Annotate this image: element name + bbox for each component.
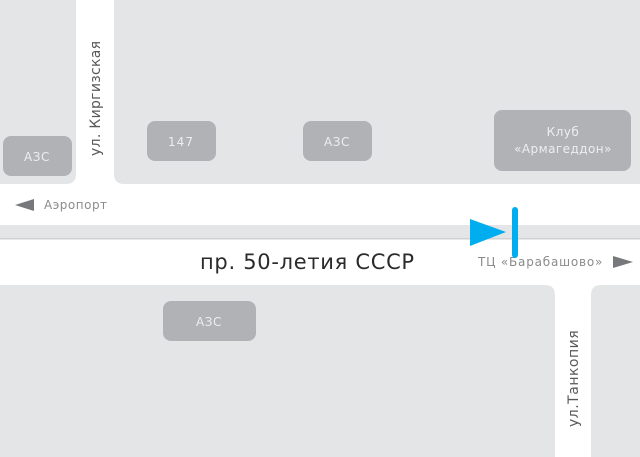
median strip xyxy=(0,225,640,240)
building: АЗС centre xyxy=(303,121,372,161)
arrow: to Barabashovo xyxy=(613,256,633,268)
building: Клуб Армагеддон: Клуб xyxy=(547,125,579,139)
building: 147 xyxy=(147,121,216,161)
building: АЗС bottom: АЗС xyxy=(196,315,222,329)
building: АЗС left: АЗС xyxy=(24,150,50,164)
building: АЗС left xyxy=(3,136,72,176)
building: Клуб Армагеддон xyxy=(494,110,631,171)
arrow: to airport xyxy=(15,199,34,211)
street label: Киргизская: ул. Киргизская xyxy=(88,41,104,156)
block: top right xyxy=(114,0,640,184)
block: top left xyxy=(0,0,76,184)
marker: blue arrow and stop line xyxy=(470,207,518,258)
building: АЗС bottom xyxy=(163,301,256,341)
street label: Танкопия: ул.Танкопия xyxy=(566,330,582,427)
main road label: пр. 50-летия СССР xyxy=(200,250,415,274)
label: Аэропорт: Аэропорт xyxy=(44,198,108,212)
label: ТЦ Барабашово: ТЦ «Барабашово» xyxy=(477,255,603,269)
building: Клуб Армагеддон: «Армагеддон» xyxy=(514,142,612,156)
block: bottom right xyxy=(591,285,640,457)
building: 147: 147 xyxy=(168,135,194,149)
building: АЗС centre: АЗС xyxy=(324,135,350,149)
block: bottom left xyxy=(0,285,555,457)
